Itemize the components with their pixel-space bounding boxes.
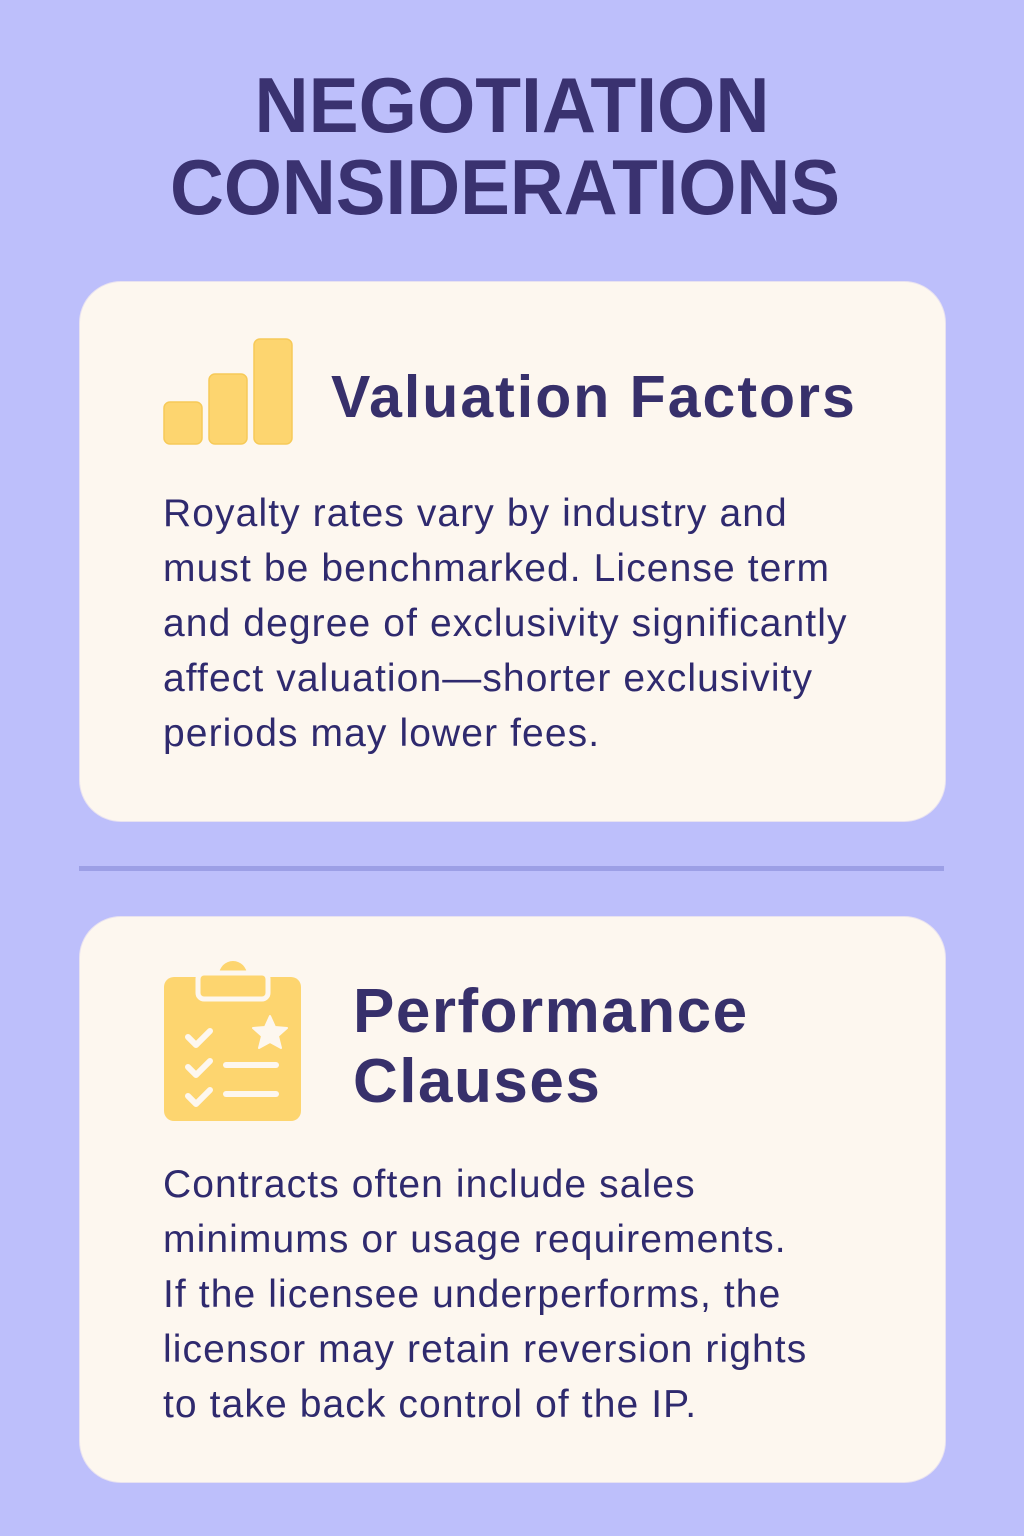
title: CONSIDERATIONS [170,143,840,230]
icon: bar chart [163,338,293,445]
text: valuation body: affect valuation—shorter exclusivity [163,657,813,700]
text: valuation body [163,492,848,755]
text: performance body: minimums or usage requirements. [163,1218,787,1261]
heading: valuation factors: Valuation Factors [331,364,857,430]
text: performance body: licensor may retain reversion rights [163,1328,807,1371]
text: performance body: to take back control of the IP. [163,1383,697,1426]
text: performance body: If the licensee underperforms, the [163,1273,781,1316]
heading: performance clauses [353,977,749,1116]
heading: performance clauses: Performance [353,977,749,1046]
text: valuation body: periods may lower fees. [163,712,600,755]
text: performance body: Contracts often include sales [163,1163,696,1206]
icon: clipboard [164,961,301,1121]
text: valuation body: must be benchmarked. License term [163,547,830,590]
text: valuation body: Royalty rates vary by industry and [163,492,788,535]
text: valuation body: and degree of exclusivity significantly [163,602,848,645]
panel: valuation factors [79,281,946,822]
title [170,61,840,230]
heading: performance clauses: Clauses [353,1047,601,1116]
title: NEGOTIATION [254,61,770,149]
text: performance body [163,1163,807,1426]
panel: performance clauses [79,916,946,1483]
